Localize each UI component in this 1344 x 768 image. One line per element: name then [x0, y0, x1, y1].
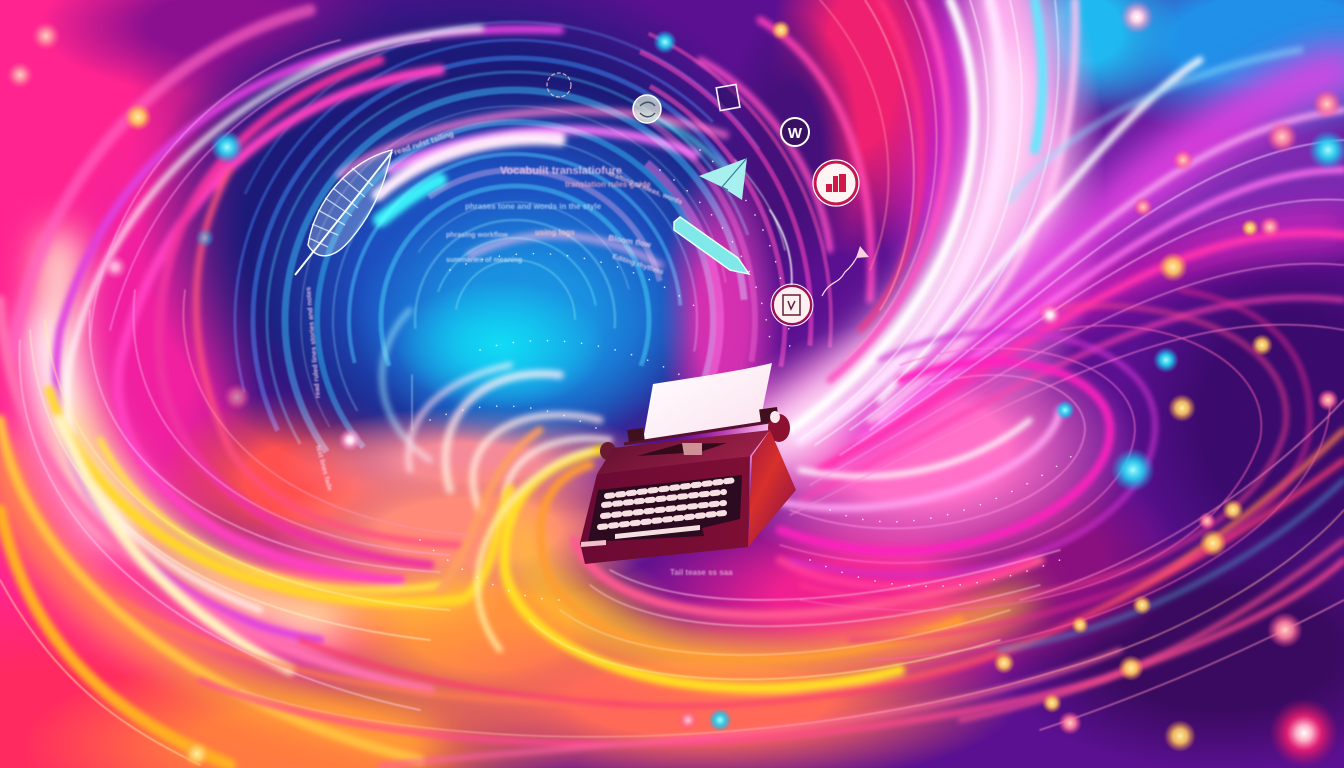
icon: W badge: W	[788, 125, 803, 142]
speckled text fragments in vortex	[305, 129, 733, 577]
bottom text: Tail tease ss saa	[670, 568, 733, 577]
front lip	[581, 540, 606, 547]
left label: read ruled lines stories and notes	[305, 286, 322, 398]
icon: paper plane	[699, 158, 747, 200]
keys	[600, 480, 736, 527]
paper	[643, 363, 772, 440]
icon: feather	[295, 150, 392, 275]
centre yellow curl	[120, 430, 1344, 766]
icon: W badge	[781, 118, 809, 146]
arcs around tunnel	[340, 20, 871, 520]
dust speckles	[420, 150, 1080, 600]
body side	[748, 430, 796, 547]
text line 4: phrasing workflow	[446, 232, 508, 239]
text line 3: phrases tone and words in the style	[465, 202, 602, 211]
text right 3: drafting of ideas, words	[607, 170, 683, 206]
heading fragment: Vocabulit translatiofure	[500, 165, 622, 177]
type slot	[637, 443, 727, 456]
icon: rising trend arrow	[822, 246, 869, 296]
right spiral	[770, 290, 1344, 720]
icon: square	[716, 84, 740, 111]
space bar	[615, 525, 700, 539]
text line 2: translation rules guide	[565, 180, 651, 189]
icon: pencil arrow	[674, 217, 749, 274]
text line 6: summaries of meaning	[446, 257, 522, 264]
icon: dotted circle	[547, 73, 571, 97]
carriage and platen	[600, 407, 790, 460]
left ribbons	[0, 10, 560, 765]
curved label top: read rulst tsiling	[393, 129, 455, 157]
keyboard well	[588, 475, 742, 542]
tunnel rings	[95, 0, 935, 740]
icon: bar chart badge	[813, 160, 859, 206]
left low label: text lines fade	[314, 445, 333, 492]
body top	[597, 430, 770, 474]
text line 5: using logs	[535, 228, 576, 237]
text right 2: Editing rhythms	[611, 253, 664, 276]
text right 1: Bloom flow	[608, 233, 652, 250]
icon: smiley badge	[633, 95, 661, 123]
typewriter	[580, 363, 796, 564]
body front	[580, 456, 750, 564]
icon: document badge	[771, 284, 813, 326]
